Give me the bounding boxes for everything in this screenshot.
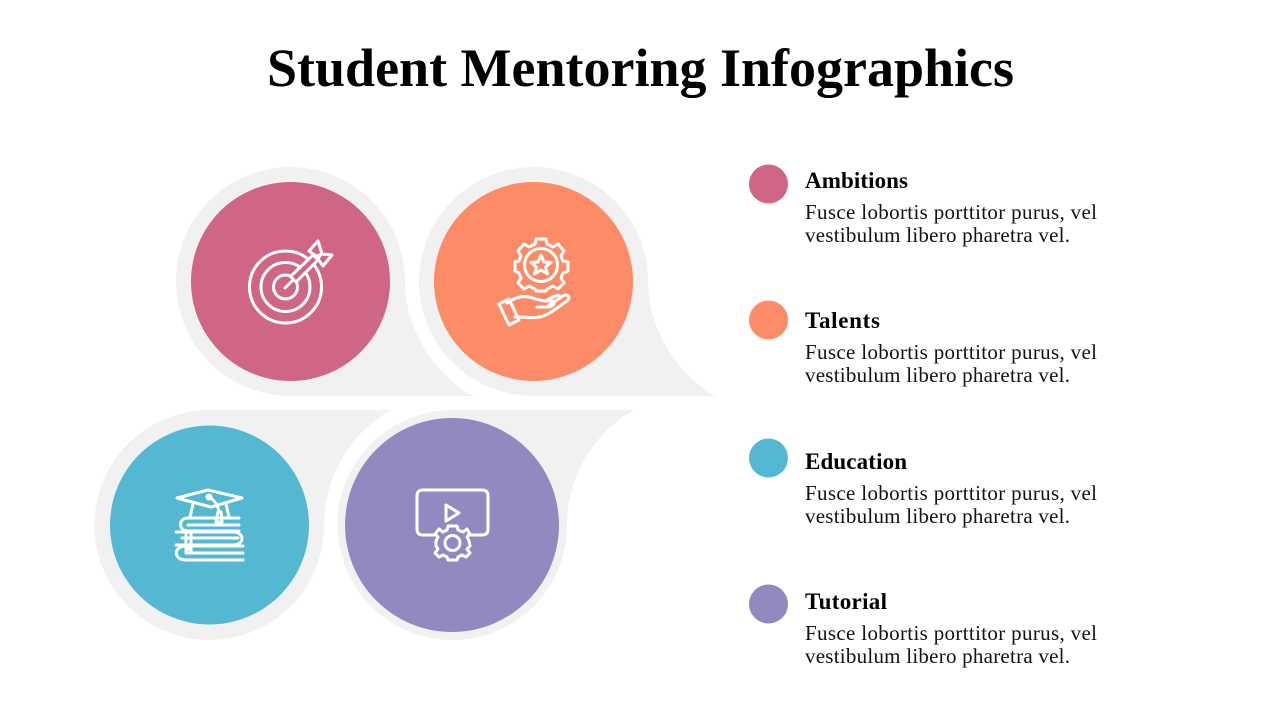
legend: tutorial [749,584,1097,668]
icon: video screen with gear [417,490,488,560]
legend: ambitions: Ambitions [805,168,908,193]
legend: education: Fusce lobortis porttitor purus, vel [805,481,1097,505]
legend: ambitions: Fusce lobortis porttitor purus, vel [805,200,1097,224]
legend: tutorial: Fusce lobortis porttitor purus, vel [805,621,1097,645]
icon: gear with star above hand [499,239,569,325]
panel: talents badge [419,167,715,396]
legend: talents: Fusce lobortis porttitor purus, vel [805,340,1097,364]
title: Student Mentoring Infographics [267,38,1014,98]
legend: education [749,438,1097,528]
panel: education badge [94,410,391,640]
legend: ambitions [749,164,1097,247]
legend: education: Education [805,449,907,474]
panel: tutorial badge [337,410,634,640]
legend: tutorial: vestibulum libero pharetra vel. [805,644,1070,668]
icon: target with dart [250,241,332,323]
legend: talents [749,300,1097,387]
legend: tutorial: Tutorial [805,589,887,614]
legend: education: vestibulum libero pharetra vel. [805,504,1070,528]
legend: ambitions: vestibulum libero pharetra vel. [805,223,1070,247]
legend: talents: Talents [805,308,880,333]
icon: graduation cap on books [176,490,243,560]
panel: ambitions badge [176,167,473,396]
legend: talents: vestibulum libero pharetra vel. [805,363,1070,387]
